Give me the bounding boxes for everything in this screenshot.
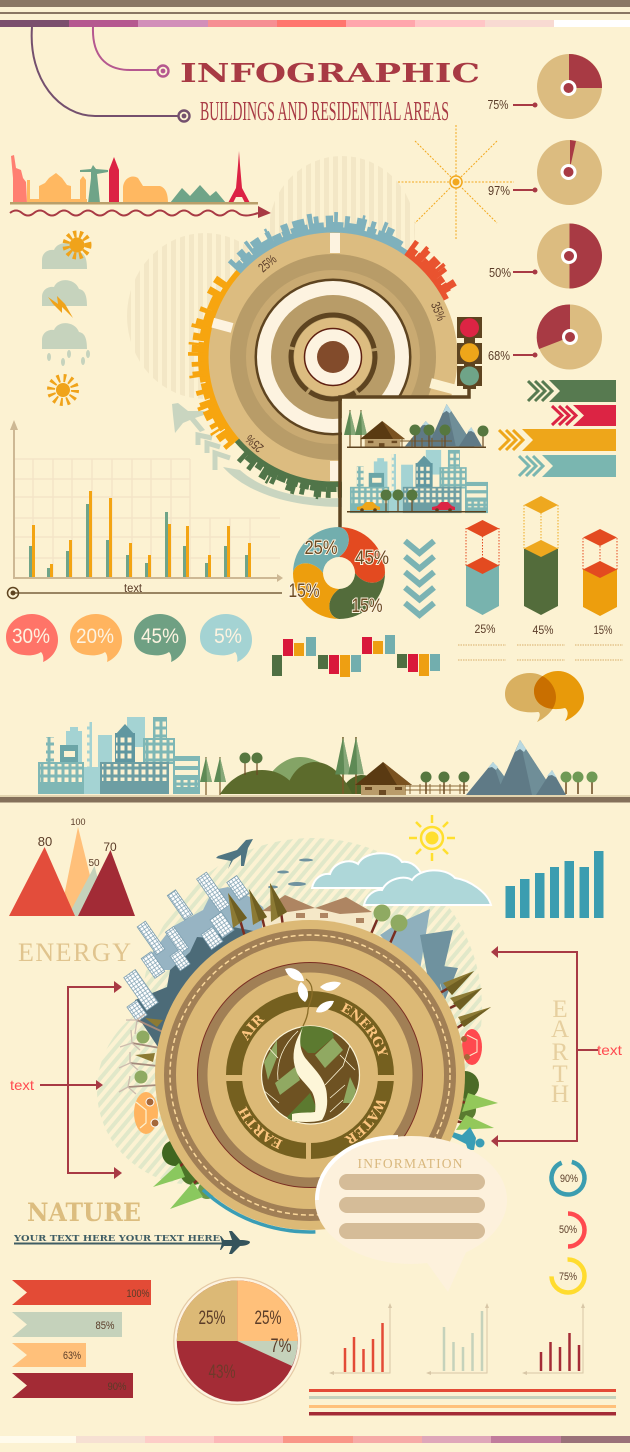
tagline plane [14, 1231, 250, 1254]
progress ring 50%: 50% [559, 1224, 577, 1236]
cloud [364, 870, 491, 905]
ribbon 100%: 100% [126, 1288, 150, 1300]
weather icon: sun behind cloud [42, 234, 88, 269]
ribbon 63% [12, 1343, 86, 1367]
word EARTH vertical: E [552, 996, 568, 1023]
swirl donut: 45% [355, 548, 389, 569]
word EARTH vertical [551, 996, 569, 1108]
skyline: red [145, 169, 521, 545]
skyline: orange [143, 167, 523, 547]
striped globe backdrop [97, 838, 482, 1185]
ribbon 85% [12, 1312, 122, 1337]
hex column 25% [466, 520, 499, 636]
ring with element labels: ENERGY [340, 1002, 388, 1056]
ribbon 100% [12, 1280, 151, 1305]
right bracket arrows [491, 946, 598, 1147]
word ENERGY: ENERGY [18, 938, 131, 967]
chart caption line: text [124, 581, 143, 595]
information bubble [315, 1136, 507, 1292]
swirl donut [288, 527, 389, 619]
left bracket arrows [40, 981, 122, 1179]
pie chart [174, 1278, 301, 1404]
triangle chart [9, 817, 135, 916]
sun [409, 815, 455, 861]
hex column 45% [524, 496, 558, 637]
pie: 75% [488, 54, 602, 119]
ring with element labels: AIR [242, 1015, 265, 1041]
landmark skyline [10, 151, 258, 204]
swirl donut: 25% [304, 538, 338, 559]
hex column 15%: 15% [594, 623, 613, 637]
progress ring 50% [559, 1214, 584, 1246]
bar chart [10, 420, 283, 582]
label text right: text [597, 1042, 622, 1058]
ring with element labels [226, 991, 394, 1159]
word EARTH vertical: H [551, 1081, 569, 1108]
ribbon 90% [12, 1373, 133, 1398]
houses on globe [262, 895, 372, 935]
pie chart: 43% [208, 1362, 236, 1383]
swirl donut: 15% [288, 581, 320, 602]
tagline: YOUR TEXT HERE YOUR TEXT HERE [13, 1234, 221, 1244]
triangle chart: 100 [70, 817, 86, 827]
house and mountains scene [344, 404, 488, 448]
orange car [134, 1092, 159, 1134]
plane [216, 839, 253, 869]
double speech bubbles [505, 671, 584, 722]
chart caption line [8, 581, 282, 598]
pines top [228, 883, 287, 937]
word EARTH vertical: T [552, 1061, 568, 1088]
plane and band behind wheel [172, 403, 342, 507]
hills and trees [200, 737, 598, 795]
connector curves [32, 27, 189, 122]
triangle chart: 70 [103, 840, 117, 854]
bubble 45% [134, 614, 186, 662]
word NATURE: NATURE [27, 1198, 141, 1227]
progress ring 90% [548, 1158, 588, 1198]
windmills left [119, 1014, 163, 1094]
city scene [347, 450, 488, 513]
hex column 45%: 45% [532, 623, 554, 637]
pie: 97% [488, 140, 602, 205]
small chart pale [426, 1303, 489, 1375]
striped backdrop [127, 156, 415, 399]
section divider [0, 795, 630, 802]
swirl donut: 15% [352, 596, 383, 617]
pie: 50%: 50% [489, 265, 511, 280]
pie: 50% [489, 224, 602, 288]
dotted note lines [458, 645, 623, 660]
weather icon: sun [51, 378, 75, 402]
ribbon arrows [499, 380, 616, 477]
bubble 30% [6, 614, 58, 662]
pie: 68% [488, 304, 602, 370]
hex column 25%: 25% [474, 622, 496, 636]
teal ribbon [519, 455, 616, 477]
bubble 5%: 5% [214, 625, 242, 648]
large city [38, 717, 200, 794]
bottom strip [0, 1436, 630, 1443]
pie: 97%: 97% [488, 183, 510, 198]
ring with element labels: EARTH [238, 1106, 283, 1150]
birds [268, 858, 313, 888]
wheel rings [208, 232, 458, 482]
triangle chart: 50 [88, 858, 100, 869]
bubble 20%: 20% [76, 625, 114, 648]
pines right [440, 971, 491, 1028]
mini offset bars [272, 635, 440, 677]
red car [461, 1029, 482, 1065]
word EARTH vertical: A [551, 1016, 569, 1043]
sprout [285, 968, 341, 1026]
framed scene box [340, 385, 490, 530]
bubble 5% [200, 614, 252, 662]
weather icon: rain [42, 323, 90, 366]
hex column 15% [583, 529, 617, 637]
cloud [312, 853, 426, 888]
green trees right [451, 1071, 498, 1130]
triangle chart: 80 [38, 834, 52, 849]
bubble 45%: 45% [141, 625, 179, 648]
progress ring 75%: 75% [559, 1271, 577, 1283]
progress ring 75% [552, 1260, 584, 1292]
information rows [339, 1174, 485, 1239]
bottom landscape [38, 717, 598, 795]
wave arrow [10, 206, 271, 218]
teal chevrons [405, 541, 434, 615]
ribbon 85%: 85% [96, 1320, 115, 1332]
word EARTH vertical: R [552, 1039, 569, 1066]
dotted sun rays [398, 125, 514, 240]
mountains right [371, 904, 458, 1000]
progress ring 90%: 90% [560, 1173, 578, 1185]
ribbon 90%: 90% [108, 1381, 127, 1393]
city on globe [124, 872, 275, 1050]
ring with element labels: WATER [344, 1100, 386, 1144]
ring chart with skyline [142, 166, 524, 548]
pie chart: 25% [254, 1308, 282, 1329]
blue figure [450, 1127, 484, 1150]
percent label 25% inverted: 25% [242, 431, 266, 456]
weather icon: storm [42, 280, 87, 318]
title: INFOGRAPHIC [180, 59, 480, 89]
bottom colour lines [309, 1389, 616, 1416]
small chart maroon [522, 1303, 585, 1375]
bubble 30%: 30% [12, 625, 50, 648]
leaf emblem [262, 1026, 360, 1124]
globe [155, 920, 465, 1234]
label text left: text [10, 1077, 34, 1093]
orange ribbon [499, 429, 616, 451]
pie: 68%: 68% [488, 348, 510, 363]
percent label 35%: 35% [428, 300, 449, 323]
pie: 75%: 75% [488, 97, 509, 112]
trees bottom left [153, 1140, 216, 1209]
information heading: INFORMATION [358, 1156, 463, 1171]
percent label 25%: 25% [255, 251, 280, 275]
skyline: blue [142, 166, 524, 548]
bubble 20% [70, 614, 122, 662]
traffic light [457, 317, 482, 389]
small chart red [329, 1303, 392, 1375]
red ribbon [552, 405, 616, 426]
green ribbon [528, 380, 616, 402]
skyline: green [190, 214, 476, 500]
pie chart: 7% [270, 1336, 292, 1357]
top stripes [0, 0, 630, 27]
teal bar chart [506, 851, 604, 918]
ribbon 63%: 63% [63, 1350, 81, 1362]
pie chart: 25% [198, 1308, 226, 1329]
